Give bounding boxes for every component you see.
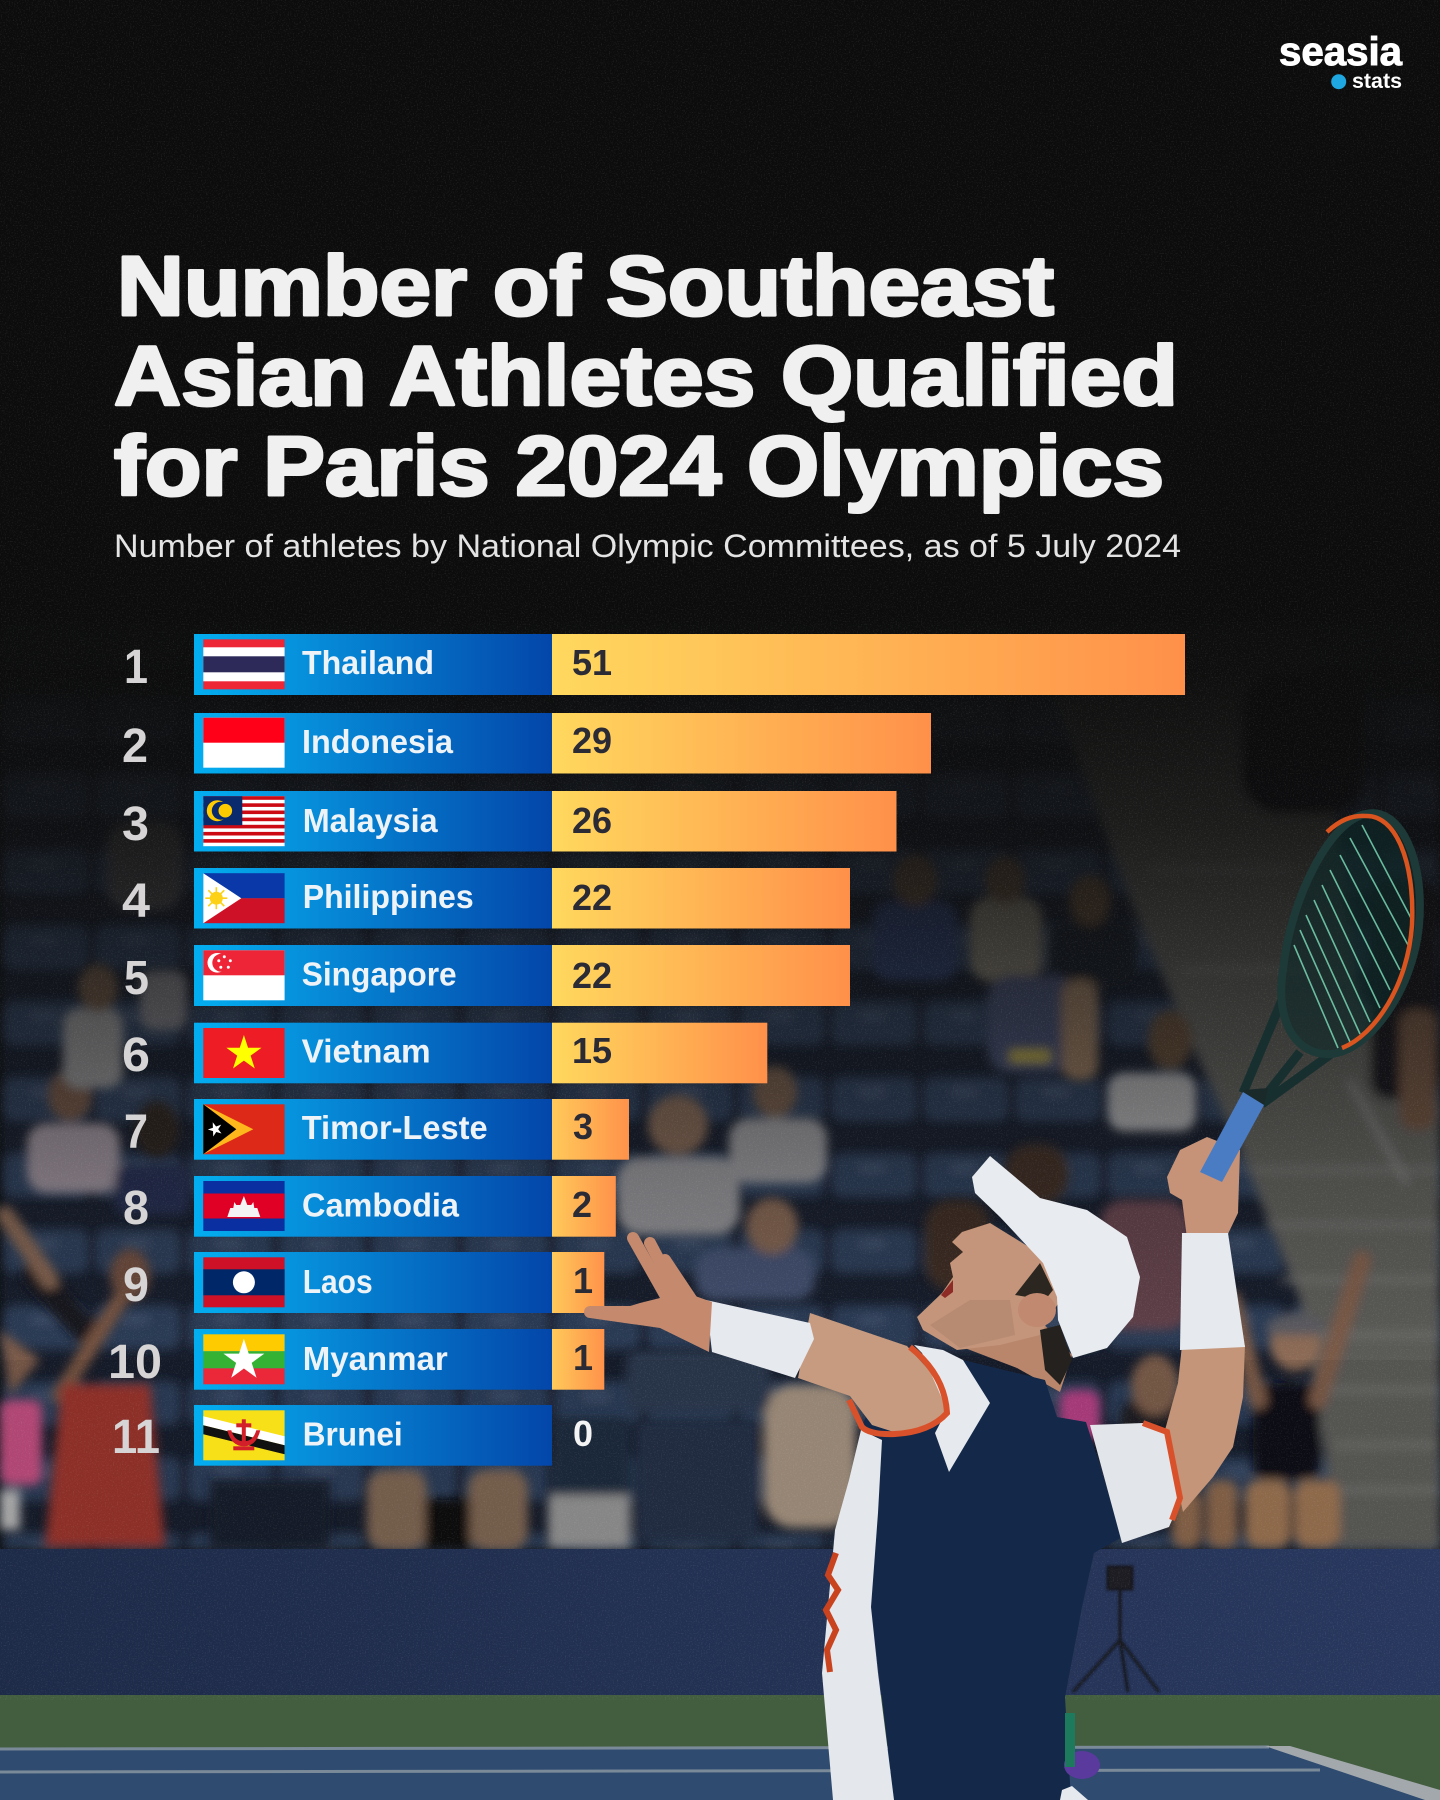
flag: Indonesia <box>203 718 285 768</box>
row 10: Myanmar: Myanmar <box>303 1340 448 1377</box>
flag: Laos <box>203 1257 285 1307</box>
row 11: Brunei <box>112 1405 593 1466</box>
row 10: Myanmar: 1 <box>573 1337 593 1378</box>
woman cheering <box>1253 1383 1320 1479</box>
title: Asian Athletes Qualified <box>114 329 1178 423</box>
court lines <box>0 1746 1440 1800</box>
logo: seasia stats: stats <box>1352 70 1402 93</box>
shirt left sleeve <box>914 1345 990 1472</box>
row 2: Indonesia: Indonesia <box>302 723 454 760</box>
shirt torso <box>861 1350 1122 1800</box>
row 9: Laos <box>123 1252 604 1313</box>
top dark fade <box>0 560 1440 1360</box>
raised arm <box>1165 1345 1245 1512</box>
racket grip <box>1200 1092 1264 1182</box>
row 7: Timor-Leste <box>124 1099 629 1160</box>
sleeve trim right <box>1143 1423 1180 1520</box>
player: tennis player with racket <box>590 813 1420 1800</box>
row 3: Malaysia <box>122 791 896 852</box>
row 7: Timor-Leste: 3 <box>573 1106 593 1147</box>
flag: Singapore <box>203 950 285 1000</box>
row 2: Indonesia <box>122 713 931 774</box>
row 3: Malaysia: 26 <box>572 800 612 841</box>
hair <box>1015 1263 1053 1300</box>
row 4: Philippines: Philippines <box>303 878 474 915</box>
wristband right <box>1180 1233 1245 1350</box>
subtitle: Number of athletes by National Olympic Committees, as of 5 July 2024 <box>114 528 1181 564</box>
row 1: Thailand: 1 <box>124 641 148 694</box>
court barrier wall <box>0 1549 1440 1695</box>
row 4: Philippines: 22 <box>572 877 612 918</box>
row 5: Singapore: 22 <box>572 955 612 996</box>
row 3: Malaysia: Malaysia <box>303 802 438 839</box>
row 1: Thailand: 51 <box>572 642 612 683</box>
face <box>917 1223 1060 1350</box>
row 8: Cambodia: 2 <box>572 1184 592 1225</box>
row 6: Vietnam: Vietnam <box>302 1033 431 1070</box>
row 5: Singapore <box>124 945 850 1006</box>
beard shadow <box>930 1300 1015 1348</box>
flag: Brunei <box>203 1410 285 1460</box>
flag: Malaysia <box>203 796 285 846</box>
row 7: Timor-Leste: 7 <box>124 1106 148 1159</box>
row 3: Malaysia: 3 <box>122 798 149 851</box>
mouth <box>941 1280 953 1298</box>
blue playing court <box>0 1747 1440 1800</box>
racket <box>1243 813 1420 1106</box>
shoe and shin <box>1064 1751 1100 1779</box>
extended arm <box>798 1313 948 1434</box>
white cap <box>972 1156 1140 1358</box>
flag: Cambodia <box>203 1181 285 1231</box>
row 11: Brunei: 11 <box>112 1411 160 1464</box>
shirt right sleeve <box>1090 1423 1182 1543</box>
lion emblem on shirt <box>826 1553 838 1672</box>
row 1: Thailand: Thailand <box>302 644 434 681</box>
row 11: Brunei: Brunei <box>303 1416 403 1453</box>
flag: Vietnam <box>203 1028 285 1078</box>
row 4: Philippines: 4 <box>122 875 150 928</box>
row 8: Cambodia: Cambodia <box>302 1187 460 1224</box>
logo: seasia stats: seasia <box>1279 30 1403 74</box>
wristband left <box>706 1300 814 1378</box>
row 10: Myanmar <box>108 1329 604 1390</box>
title: for Paris 2024 Olympics <box>114 419 1164 513</box>
row 2: Indonesia: 2 <box>122 720 148 773</box>
row 6: Vietnam: 15 <box>572 1030 612 1071</box>
raised hand <box>1167 1137 1240 1238</box>
row 1: Thailand <box>124 634 1185 695</box>
ear <box>1018 1293 1056 1327</box>
neck <box>957 1300 1072 1392</box>
bar chart <box>108 634 1185 1466</box>
flag: Timor-Leste <box>203 1104 285 1154</box>
row 9: Laos: Laos <box>303 1263 373 1300</box>
logo: seasia stats <box>1279 30 1403 93</box>
flag: Myanmar <box>203 1334 285 1384</box>
row 11: Brunei: 0 <box>573 1413 593 1454</box>
crowd and stairs <box>0 630 1440 1550</box>
row 5: Singapore: Singapore <box>302 956 457 993</box>
row 6: Vietnam: 6 <box>122 1029 150 1082</box>
row 2: Indonesia: 29 <box>572 720 612 761</box>
row 4: Philippines <box>122 868 850 928</box>
row 10: Myanmar: 10 <box>108 1336 162 1389</box>
row 5: Singapore: 5 <box>124 952 149 1005</box>
title: Number of Southeast <box>117 239 1054 333</box>
flag: Philippines <box>203 873 285 923</box>
row 7: Timor-Leste: Timor-Leste <box>302 1109 488 1146</box>
flag: Thailand <box>203 639 285 689</box>
shirt white side panel <box>822 1430 894 1800</box>
row 9: Laos: 1 <box>573 1260 593 1301</box>
green court surround <box>0 1695 1440 1800</box>
camera on tripod <box>1073 1567 1159 1692</box>
open hand <box>590 1238 712 1352</box>
row 6: Vietnam <box>122 1023 767 1083</box>
left crowd <box>27 1123 120 1193</box>
sleeve trim left <box>849 1347 947 1434</box>
row 9: Laos: 9 <box>123 1259 149 1312</box>
row 8: Cambodia <box>123 1176 616 1237</box>
title <box>114 239 1178 513</box>
stands with seats <box>0 620 1440 1550</box>
row 8: Cambodia: 8 <box>123 1182 149 1235</box>
